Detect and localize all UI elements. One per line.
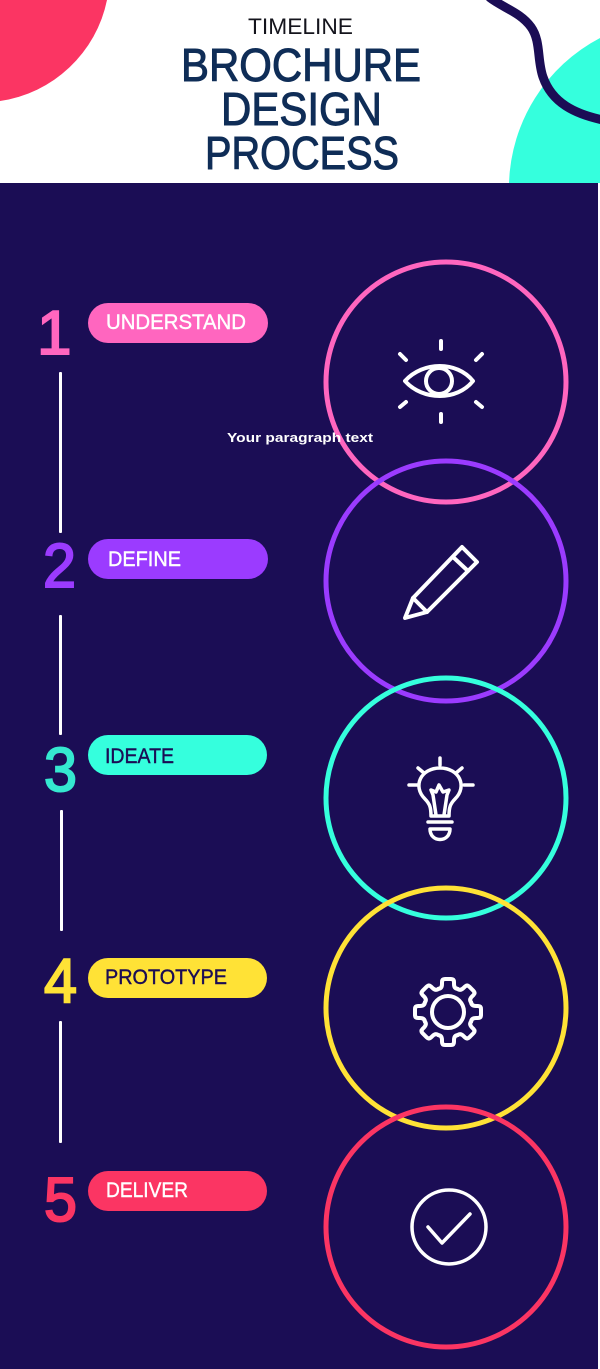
connector 3 [60, 810, 63, 931]
subtitle: TIMELINE [248, 14, 353, 39]
icon: pencil [405, 547, 477, 618]
step 1 number: 1 [37, 299, 71, 368]
icon: eye [400, 341, 482, 422]
step 5 number: 5 [44, 1166, 77, 1235]
header panel [0, 0, 600, 183]
circle: prototype [326, 888, 566, 1128]
step 2 number: 2 [43, 532, 76, 601]
icon: check mark in circle [412, 1190, 486, 1264]
step 5 pill [88, 1171, 267, 1211]
title: DESIGN [221, 83, 382, 135]
step 3 number: 3 [44, 736, 77, 805]
step 5 pill: DELIVER [106, 1179, 188, 1202]
circle: understand [326, 262, 566, 502]
step 3 pill [88, 735, 267, 775]
title: PROCESS [205, 127, 399, 179]
decorative teal circle [509, 38, 600, 183]
step 2 pill [88, 539, 268, 579]
step 3 pill: IDEATE [105, 745, 174, 768]
step 4 pill [88, 958, 267, 998]
circle: ideate [326, 678, 566, 918]
circle: define [326, 461, 566, 701]
step 2 pill: DEFINE [108, 548, 181, 571]
icon: light bulb [409, 758, 473, 840]
connector 4 [59, 1021, 62, 1143]
connector 2 [59, 615, 62, 735]
title [181, 39, 421, 179]
step 1 pill [88, 303, 268, 343]
connector 1 [59, 372, 62, 533]
title: BROCHURE [181, 39, 421, 91]
step 4 number: 4 [44, 947, 77, 1016]
decorative wavy line [489, 0, 600, 120]
step 1 pill: UNDERSTAND [106, 311, 246, 334]
icon: gear [415, 979, 481, 1045]
paragraph text: Your paragraph text [227, 430, 374, 445]
decorative red circle [0, 0, 107, 101]
step 4 pill: PROTOTYPE [105, 966, 227, 989]
circle: deliver [326, 1107, 566, 1347]
